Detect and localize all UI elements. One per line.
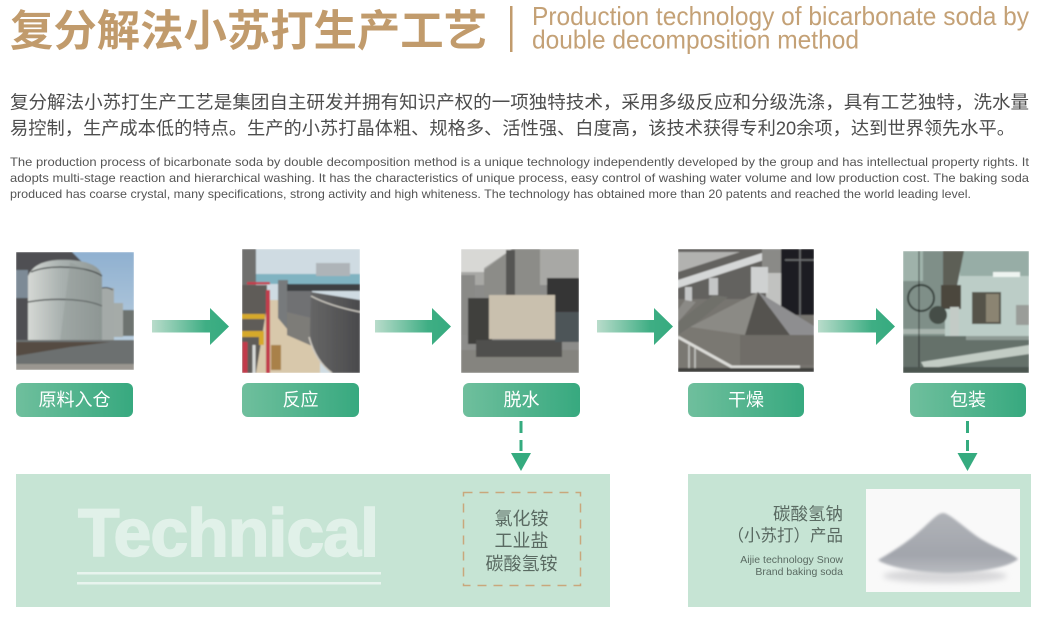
step label: 包装 (910, 383, 1026, 417)
product name: 碳酸氢钠 (773, 504, 843, 524)
dashed box: by-product list: 氯化铵 (494, 509, 548, 529)
photo: baking soda pile (866, 489, 1020, 592)
photo: packaging line (903, 251, 1029, 373)
dashed arrow: packaging to product (958, 421, 978, 471)
dashed box: by-product list: 工业盐 (494, 531, 548, 551)
product name: Brand baking soda (755, 566, 843, 578)
step label: 原料入仓: 原料入仓 (38, 390, 110, 410)
step label: 干燥: 干燥 (728, 390, 764, 410)
arrow: step 2 to 3 (375, 308, 451, 345)
product name: （小苏打）产品 (728, 526, 843, 545)
step label: 干燥 (688, 383, 804, 417)
title divider (510, 6, 512, 52)
photo: reaction tanks (242, 249, 360, 373)
arrow: step 3 to 4 (597, 308, 673, 345)
step label: 脱水 (463, 383, 580, 417)
step label: 包装: 包装 (950, 390, 986, 410)
arrow: step 4 to 5 (818, 308, 895, 345)
photo: drying equipment (678, 249, 814, 372)
title: English heading: double decomposition method (532, 24, 859, 54)
product name: Aijie technology Snow (740, 554, 843, 566)
dashed box: by-product list (464, 492, 580, 586)
step label: 反应 (242, 383, 359, 417)
step label: 反应: 反应 (282, 390, 318, 410)
text block: English description (10, 155, 1030, 201)
product name (728, 504, 843, 578)
arrow: step 1 to 2 (152, 308, 229, 345)
dashed arrow: dewatering to by-products (511, 421, 531, 471)
title: English heading (532, 1, 1029, 54)
step label: 原料入仓 (16, 383, 133, 417)
text block: English description: adopts multi-stage reaction and hierarchical washing. It has the characteristics of unique process, easy control of washing water volume and low production cost. The baking soda (10, 171, 1029, 185)
watermark underlines (77, 572, 381, 584)
panel: product (688, 474, 1031, 607)
text block: English description: produced has coarse crystal, many specifications, strong activity and high whiteness. The technology has obtained more than 20 patents and reached the world leading level. (10, 187, 971, 201)
panel: by-products (16, 474, 610, 607)
text block: Chinese description: 易控制，生产成本低的特点。生产的小苏打晶体粗、规格多、活性强、白度高，该技术获得专利20余项，达到世界领先水平。 (10, 118, 1015, 138)
step label: 脱水: 脱水 (504, 390, 540, 410)
dashed box: by-product list: 碳酸氢铵 (486, 554, 558, 574)
photo: dewatering equipment (461, 249, 579, 373)
photo: raw material storage tanks (16, 252, 134, 370)
text block: English description: The production process of bicarbonate soda by double decomposition method is a unique technology independently developed by the group and has intellectual property rights. It (10, 155, 1030, 169)
watermark: Technical: Technical (78, 495, 379, 571)
title: Chinese heading: 复分解法小苏打生产工艺 (10, 8, 487, 56)
text block: Chinese description: 复分解法小苏打生产工艺是集团自主研发并拥有知识产权的一项独特技术，采用多级反应和分级洗涤，具有工艺独特，洗水量 (10, 92, 1029, 112)
text block: Chinese description (10, 92, 1029, 138)
